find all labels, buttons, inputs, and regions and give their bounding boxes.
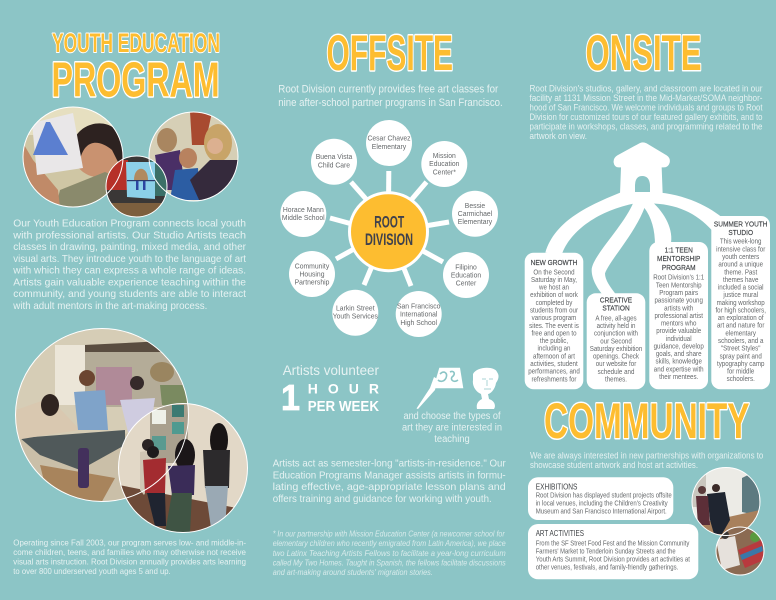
text: offsite intro — [278, 84, 503, 109]
hub: Root Division — [350, 193, 428, 271]
title: Youth Education Program — [52, 28, 220, 108]
card: Summer Youth Studio: around a unique — [718, 261, 763, 269]
text: community intro: showcase student artwork and host art activities. — [530, 460, 698, 471]
card: 1:1 Teen Mentorship Program: PROGRAM — [662, 264, 696, 272]
photo: artists and students around a table — [15, 328, 190, 505]
card: Summer Youth Studio: elementary — [725, 330, 757, 338]
partner: Horace Mann Middle School: Middle School — [282, 214, 325, 222]
text: footnote on Mission Education Center: * In our partnership with Mission Education Center (a newcomer school for — [273, 530, 505, 539]
text: onsite intro: Root Division's studios, gallery, and classroom are located in our — [530, 84, 763, 94]
card: Summer Youth Studio: intensive class for — [716, 246, 766, 253]
text: onsite intro: facility at 1131 Mission Street in the Mid-Market/SOMA neighbor- — [530, 93, 763, 103]
partner: Community Housing Partnership: Housing — [300, 270, 325, 279]
photo: children viewing artwork on a wall — [119, 403, 249, 533]
card: New Growth: free and open to — [531, 330, 577, 338]
hub: Root Division: ROOT — [374, 212, 405, 231]
card: New Growth: the public, — [540, 338, 568, 345]
partner: Buena Vista Child Care: Buena Vista — [316, 153, 352, 161]
partner: Buena Vista Child Care — [311, 139, 357, 185]
photo: family art activity on a colorful rug — [716, 527, 764, 575]
card: Creative Station: Saturday exhibition — [590, 346, 643, 353]
partner: Cesar Chavez Elementary: Cesar Chavez — [367, 134, 411, 143]
title: Onsite: ONSITE — [586, 25, 702, 81]
card: Exhibitions: Root Division has displayed student projects offsite — [536, 491, 672, 500]
partner: Larkin Street Youth Services — [332, 290, 378, 336]
text: youth education intro: Our Youth Education Program connects local youth — [13, 218, 246, 230]
partner: Bessie Carmichael Elementary — [452, 191, 498, 237]
icon: sculpted bust — [473, 368, 499, 409]
partner: Bessie Carmichael Elementary: Carmichael — [458, 210, 493, 218]
card: 1:1 Teen Mentorship Program — [649, 242, 708, 389]
card: 1:1 Teen Mentorship Program: Root Division's 1:1 — [653, 274, 704, 282]
card: Summer Youth Studio: schoolers. — [727, 376, 755, 383]
partner: Horace Mann Middle School: Horace Mann — [283, 206, 324, 214]
stat: artists volunteer 1 hour per week: 1 — [281, 377, 300, 418]
card: Creative Station: CREATIVE — [600, 296, 632, 304]
text: artists in residence — [273, 459, 506, 505]
photo frames — [16, 328, 248, 532]
card: 1:1 Teen Mentorship Program: individual — [666, 335, 692, 343]
card: Art Activities: other venues, festivals, and family-friendly gatherings. — [536, 562, 678, 571]
card: Summer Youth Studio: spray paint and — [720, 353, 762, 360]
text: choose types of art: and choose the types of — [404, 411, 501, 422]
text: footnote on Mission Education Center: called My Two Homes. Taught in Spanish, the fellows facilitate discussions — [273, 558, 506, 567]
text: youth education intro: community, and young students are able to interact — [13, 289, 246, 300]
text: choose types of art: art they are interested in — [402, 423, 502, 434]
partner: San Francisco International High School: San Francisco — [397, 302, 440, 311]
card: Creative Station: STATION — [602, 304, 630, 313]
card: New Growth: sites. The event is — [529, 322, 579, 330]
card: Creative Station: our website for — [596, 361, 637, 368]
text: youth education intro: visual arts. They introduce youth to the language of art — [13, 254, 246, 265]
card: Summer Youth Studio: art and nature for — [717, 322, 765, 330]
card: Summer Youth Studio: included a social — [718, 284, 764, 292]
text: choose types of art — [402, 411, 502, 445]
card: New Growth: including an — [538, 345, 571, 353]
card: New Growth: exhibition of work — [530, 292, 578, 299]
partner: Cesar Chavez Elementary: Elementary — [372, 143, 407, 151]
partner: Bessie Carmichael Elementary: Bessie — [465, 202, 485, 210]
card: Summer Youth Studio: "Street Styles" — [721, 345, 761, 353]
card: New Growth: completed by — [536, 300, 573, 307]
text: program reach: Operating since Fall 2003, our program serves low- and middle-in- — [13, 538, 246, 548]
card: Creative Station: our Second — [600, 338, 632, 345]
partner: San Francisco International High School: High School — [400, 319, 437, 327]
card: Art Activities: ART ACTIVITIES — [536, 529, 584, 538]
hub: Root Division: DIVISION — [365, 230, 413, 249]
card: Summer Youth Studio: typography camp — [717, 361, 765, 368]
card: 1:1 Teen Mentorship Program: 1:1 TEEN — [665, 246, 693, 254]
diagram: house with branching roots — [545, 142, 722, 295]
card: 1:1 Teen Mentorship Program: professional artist — [654, 313, 703, 320]
card: Exhibitions: in local venues, including the Children's Creativity — [536, 498, 668, 508]
card: Summer Youth Studio: schoolers, and a — [718, 338, 764, 345]
text: footnote on Mission Education Center: and art-making around students' migration stories. — [273, 568, 433, 577]
text: artists in residence: offers training and guidance for working with youth. — [273, 494, 492, 505]
text: offsite intro: Root Division currently provides free art classes for — [278, 84, 499, 96]
card: Creative Station: A free, all-ages — [595, 315, 637, 322]
card: Summer Youth Studio: STUDIO — [728, 229, 753, 237]
photo: gallery visitors — [692, 467, 761, 536]
text: youth education intro: Artists gain valuable experience teaching within the — [13, 277, 246, 288]
partner: Filipino Education Center: Filipino — [455, 263, 477, 271]
partner: Filipino Education Center: Center — [456, 279, 477, 288]
card: New Growth: various program — [532, 315, 577, 322]
card: New Growth: refreshments for — [531, 376, 577, 383]
card: Exhibitions: EXHIBITIONS — [536, 482, 577, 491]
text: program reach: visual arts instruction. Root Division annually provides arts learning — [13, 556, 246, 566]
stat: artists volunteer 1 hour per week: PER WEEK — [308, 399, 379, 415]
card: Exhibitions — [528, 477, 673, 520]
card: 1:1 Teen Mentorship Program: Teen Mentorship — [656, 282, 702, 289]
text: youth education intro: with professional artists. Our Studio Artists teach — [12, 230, 246, 241]
photo: boy holding a drawing — [23, 107, 125, 210]
card: Art Activities: Youth Arts Summit, Root Division provides art activities at — [536, 554, 690, 564]
partner: San Francisco International High School — [396, 291, 442, 337]
card: 1:1 Teen Mentorship Program: MENTORSHIP — [657, 255, 701, 263]
partner: Filipino Education Center: Education — [451, 271, 481, 280]
card: Summer Youth Studio: for high schoolers, — [715, 307, 766, 315]
text: offsite intro: nine after-school partner programs in San Francisco. — [278, 97, 503, 109]
stat: artists volunteer 1 hour per week: HOUR — [308, 380, 379, 396]
card: New Growth: we host an — [538, 284, 569, 292]
partner: Community Housing Partnership: Community — [295, 262, 330, 270]
text: onsite intro — [530, 84, 763, 141]
partner: Mission Education Center — [421, 141, 467, 187]
text: artists in residence: lating effective, age-appropriate lesson plans and — [273, 482, 506, 493]
partner: Filipino Education Center — [443, 252, 489, 298]
card: 1:1 Teen Mentorship Program: skills, knowledge — [656, 358, 702, 366]
title: Offsite: OFFSITE — [326, 25, 453, 81]
card: Summer Youth Studio — [711, 216, 770, 389]
partner: Community Housing Partnership — [289, 251, 335, 297]
card: Creative Station: themes. — [605, 376, 627, 384]
card: New Growth: NEW GROWTH — [531, 259, 577, 267]
partner: Community Housing Partnership: Partnership — [295, 278, 329, 287]
icon: brush and canvas — [416, 368, 463, 409]
card: New Growth: On the Second — [533, 269, 575, 276]
card: Creative Station: schedule and — [598, 368, 635, 376]
card: New Growth: afternoon of art — [533, 353, 575, 360]
photo: child painting on blue paper — [106, 156, 168, 218]
card: Summer Youth Studio: justice mural — [722, 292, 759, 299]
stat: artists volunteer 1 hour per week: Artists volunteer — [283, 363, 379, 378]
text: artists in residence: Education Programs Manager assists artists in formu- — [273, 470, 506, 481]
card: 1:1 Teen Mentorship Program: mentors who — [661, 320, 697, 328]
partner: San Francisco International High School: International — [400, 310, 438, 319]
card: Summer Youth Studio: theme. Past — [724, 269, 757, 276]
card: Summer Youth Studio: for middle — [727, 368, 755, 376]
text: footnote on Mission Education Center — [273, 530, 506, 577]
text: artists in residence: Artists act as semester-long "artists-in-residence." Our — [273, 459, 506, 470]
partner: Larkin Street Youth Services: Larkin Street — [336, 304, 375, 313]
card: 1:1 Teen Mentorship Program: and expertise with — [654, 366, 704, 374]
text: footnote on Mission Education Center: two Latinx Teaching Artists Fellows to facilitate a year-long curriculum — [273, 549, 506, 558]
stat: artists volunteer 1 hour per week — [281, 363, 379, 418]
text: footnote on Mission Education Center: elementary children who recently emigrated from Latin America), we place — [273, 539, 506, 548]
card: New Growth: Saturday in May, — [531, 277, 577, 284]
card: 1:1 Teen Mentorship Program: passionate young — [654, 297, 703, 305]
card: New Growth: activities, student — [530, 361, 578, 368]
partner: Larkin Street Youth Services: Youth Services — [333, 312, 378, 321]
card: Summer Youth Studio: SUMMER YOUTH — [714, 220, 767, 229]
text: program reach: come children, teens, and families who may otherwise not receive — [13, 547, 246, 557]
text: youth education intro — [12, 218, 247, 312]
photo: child drawing of a figure — [149, 112, 240, 202]
card: Art Activities — [528, 524, 698, 579]
partner: Horace Mann Middle School — [280, 191, 326, 237]
text: youth education intro: with which they can express a whole range of ideas. — [12, 266, 246, 276]
text: program reach: to over 800 underserved youth ages 5 and up. — [13, 566, 171, 576]
card: Creative Station — [587, 293, 645, 389]
partner: Mission Education Center: Education — [429, 160, 459, 168]
card: Summer Youth Studio: making workshop — [717, 299, 765, 307]
title: Youth Education Program: YOUTH EDUCATION — [52, 28, 220, 58]
card: Summer Youth Studio: an exploration of — [718, 315, 764, 322]
card: Summer Youth Studio: themes have — [723, 277, 759, 284]
card: Exhibitions: Museum and San Francisco International Airport. — [536, 506, 667, 515]
card: Art Activities: From the SF Street Food Fest and the Mission Community — [536, 539, 690, 548]
text: youth education intro: with adult mentors in the art-making process. — [12, 301, 207, 312]
partner: Mission Education Center: Center* — [433, 168, 456, 176]
partner: Cesar Chavez Elementary — [366, 120, 412, 166]
card: Art Activities: Farmers' Market to Tenderloin Sunday Streets and the — [536, 546, 676, 556]
diagram: partner hub and spokes — [280, 120, 498, 337]
title: Youth Education Program: PROGRAM — [52, 54, 220, 108]
card: 1:1 Teen Mentorship Program: guidance, develop — [654, 343, 704, 351]
card: New Growth: performances, and — [528, 368, 580, 376]
card: 1:1 Teen Mentorship Program: artists with — [664, 305, 694, 312]
card: Summer Youth Studio: This week-long — [720, 238, 762, 246]
card: Creative Station: openings. Check — [593, 353, 640, 361]
text: program reach — [13, 538, 246, 576]
card: 1:1 Teen Mentorship Program: provide valuable — [656, 328, 701, 335]
photo frames — [23, 107, 238, 217]
card: New Growth: students from our — [530, 307, 579, 315]
partner: Buena Vista Child Care: Child Care — [318, 161, 350, 169]
card: 1:1 Teen Mentorship Program: Program pairs — [659, 290, 699, 297]
card: Creative Station: activity held in — [597, 323, 636, 330]
text: community intro — [530, 451, 763, 471]
photo frames — [692, 468, 764, 575]
text: choose types of art: teaching — [434, 434, 470, 445]
card: New Growth — [525, 253, 583, 389]
text: youth education intro: classes in drawing, painting, mixed media, and other — [13, 242, 247, 253]
card: 1:1 Teen Mentorship Program: their mentees. — [659, 374, 698, 381]
partner: Mission Education Center: Mission — [433, 152, 456, 160]
text: onsite intro: artwork on view. — [530, 131, 587, 141]
card: Summer Youth Studio: youth centers — [722, 254, 760, 261]
partner: Bessie Carmichael Elementary: Elementary — [458, 218, 493, 226]
card: Creative Station: conjunction with — [594, 330, 638, 338]
card: 1:1 Teen Mentorship Program: goals, and share — [656, 351, 702, 358]
